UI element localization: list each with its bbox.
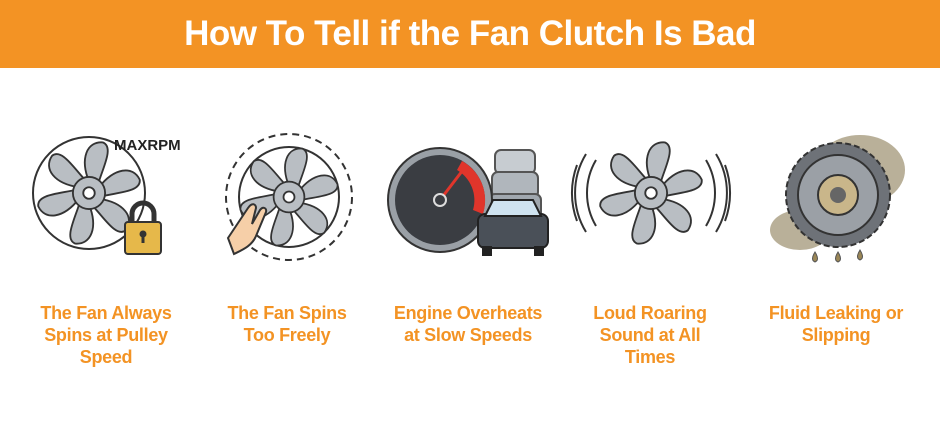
icon: fan with lock — [33, 137, 181, 254]
icon: leaking clutch — [770, 135, 905, 262]
label 1: The Fan Always Spins at Pulley Speed — [40, 303, 172, 367]
label 3 — [394, 303, 542, 345]
icon: free spinning fan with hand — [226, 134, 352, 260]
label 2: The Fan Spins Too Freely — [227, 303, 347, 345]
icon: fan with lock: MAXRPM — [114, 137, 181, 154]
label 5: Fluid Leaking or Slipping — [769, 303, 903, 345]
icon: overheating gauge with traffic — [388, 148, 548, 256]
title — [0, 0, 940, 68]
label 4: Loud Roaring Sound at All Times — [593, 303, 707, 367]
title: How To Tell if the Fan Clutch Is Bad — [184, 14, 756, 53]
label 3: at Slow Speeds — [404, 325, 532, 345]
icon: loud fan — [572, 142, 730, 244]
label 3: Engine Overheats — [394, 303, 542, 323]
